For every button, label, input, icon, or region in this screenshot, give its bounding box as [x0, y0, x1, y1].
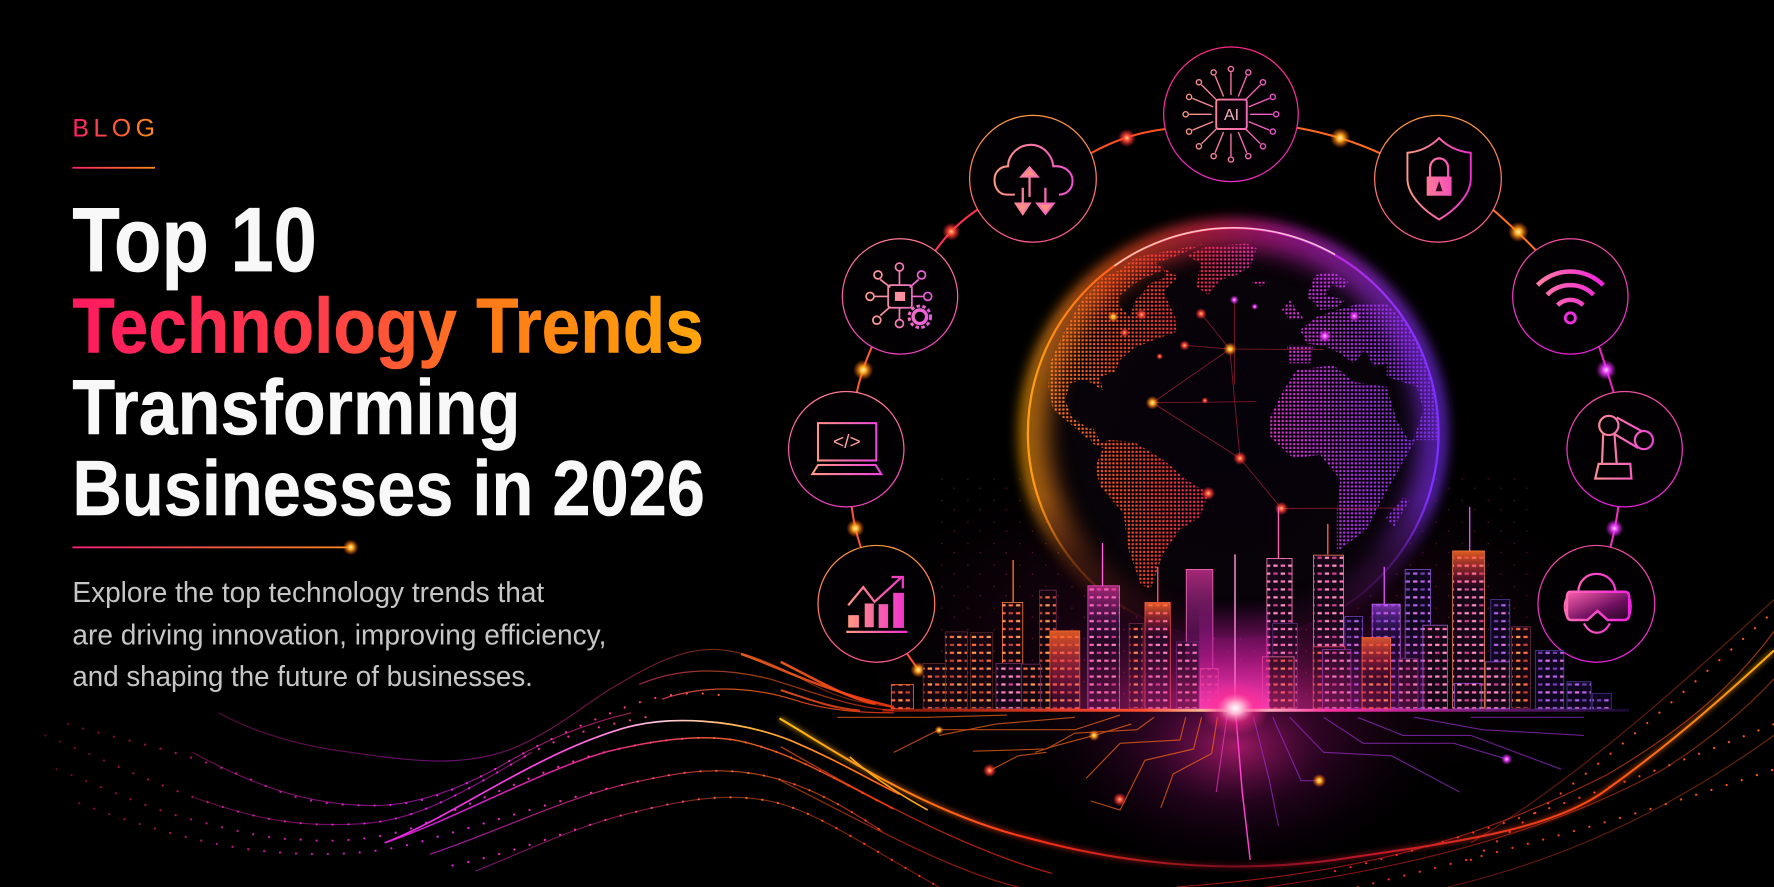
- globe rim: [1028, 228, 1439, 639]
- globe body: [1028, 229, 1438, 638]
- tower light caps: [1050, 551, 1484, 699]
- icon: chip with gear: [842, 239, 958, 354]
- icon: growth chart: [818, 545, 935, 662]
- main wave glow: [780, 651, 1774, 866]
- description: and shaping the future of businesses.: [72, 661, 533, 693]
- continents: [1048, 244, 1438, 590]
- network lines: [1152, 300, 1403, 508]
- description: [72, 577, 606, 693]
- icon: AI chip: AI: [1224, 107, 1239, 124]
- circuit floor: [837, 711, 1584, 860]
- eyebrow: BLOG: BLOG: [72, 114, 155, 142]
- icon: cloud transfer: [970, 115, 1096, 242]
- city skyline: [891, 507, 1611, 709]
- circuit traces: centre: [1216, 711, 1250, 860]
- title: Top 10: [72, 190, 317, 291]
- yellow wave fork: [850, 757, 928, 810]
- title: Technology Trends: [72, 283, 704, 369]
- floor glow: [1043, 622, 1428, 871]
- city haze glow: [803, 441, 1663, 826]
- central light beam: [1199, 554, 1269, 711]
- icon: VR headset: [1538, 545, 1655, 662]
- towers: back row: [945, 551, 1531, 709]
- icon: AI chip: [1164, 47, 1298, 182]
- arc nodes: [846, 128, 1624, 678]
- icon: laptop code: </>: [833, 432, 861, 453]
- bright white-pink wave: [385, 721, 899, 843]
- title: Businesses in 2026: [72, 446, 705, 532]
- horizon line: [882, 709, 1629, 712]
- title: Transforming: [72, 365, 520, 451]
- description: are driving innovation, improving efficiency,: [72, 619, 606, 651]
- description: Explore the top technology trends that: [72, 577, 544, 609]
- icon: laptop code: [789, 391, 904, 507]
- wave dots: [45, 611, 1774, 887]
- circuit traces: right: [1254, 717, 1584, 826]
- network nodes: [1108, 295, 1360, 515]
- circuit traces: left: [837, 715, 1217, 810]
- towers: front row: [891, 623, 1611, 709]
- arc connectors: [852, 128, 1618, 670]
- globe: [1018, 221, 1443, 640]
- circuit nodes: [935, 726, 1512, 806]
- title divider with glowing dot: [72, 539, 359, 555]
- main hot wave: [780, 651, 1774, 866]
- eyebrow underline: [72, 167, 155, 169]
- panel: left text block: [72, 114, 705, 693]
- icon: security shield: [1375, 115, 1501, 242]
- city base glow: [1052, 611, 1426, 711]
- icon: robot arm: [1567, 391, 1682, 507]
- particle field: [939, 475, 1527, 701]
- globe inner atmosphere: [1028, 229, 1438, 638]
- globe outer glow: [1026, 226, 1440, 640]
- title: [72, 190, 705, 532]
- antennas: [1013, 507, 1470, 604]
- horizon flare: [1202, 681, 1269, 735]
- icon: wifi: [1513, 239, 1628, 354]
- wave lines: magenta to orange bundle: [192, 600, 1774, 887]
